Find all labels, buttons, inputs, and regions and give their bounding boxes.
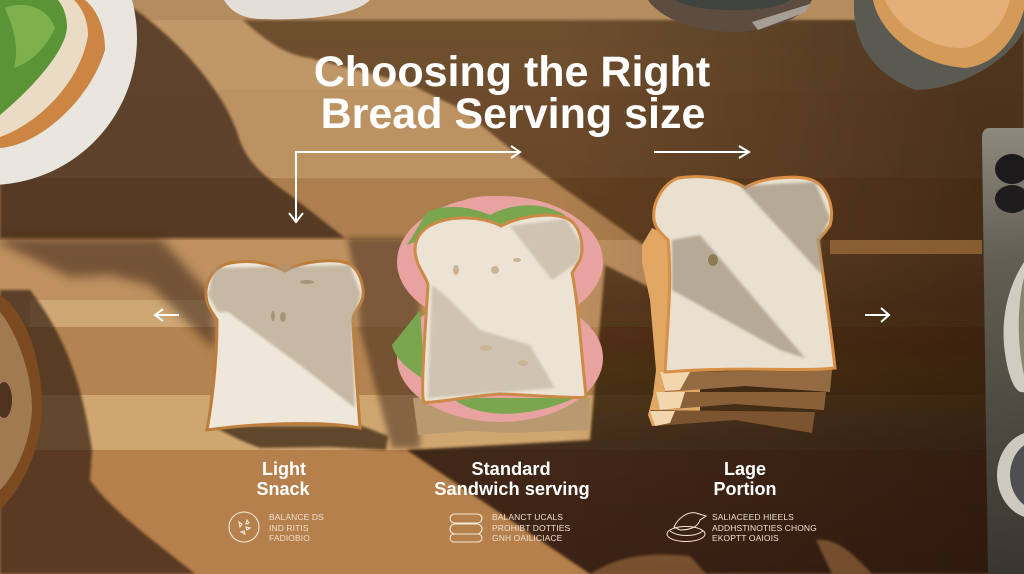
text: large portion notes: EKOPTT OAIOIS — [712, 533, 779, 543]
light snack bread slice — [206, 261, 363, 430]
label: large portion: Portion — [714, 479, 776, 499]
label: standard sandwich serving — [434, 458, 590, 499]
icon: dish with bird — [667, 513, 706, 542]
text: standard serving notes: BALANCT UCALS — [492, 512, 563, 522]
white bowl rim, top centre — [224, 0, 370, 19]
crumb holes — [271, 280, 314, 322]
text: standard serving notes: GNH OAILICIACE — [492, 533, 563, 543]
label: light snack — [256, 459, 310, 499]
arrow: left of light snack — [155, 309, 179, 321]
plate with sandwich, top left — [0, 0, 137, 185]
lit strip at right of the table — [830, 240, 982, 254]
text: light snack notes: BALANCE DS — [269, 512, 324, 522]
icon: circle — [229, 512, 259, 542]
sandwich: standard serving — [392, 196, 603, 435]
title — [314, 48, 710, 138]
arrow: right over large portion — [654, 146, 749, 158]
lower slices — [642, 228, 700, 426]
large portion: bread stack — [642, 177, 835, 433]
crumb holes — [453, 258, 528, 366]
text: light snack notes: IND RITIS — [269, 523, 309, 533]
label: standard sandwich serving: Sandwich serving — [434, 478, 590, 499]
label: light snack: Snack — [256, 479, 310, 499]
shadow across bread — [208, 265, 361, 408]
text: large portion notes: ADDHSTINOTIES CHONG — [712, 523, 817, 533]
bottom bread slice — [413, 398, 590, 435]
glass with bread roll, top right — [854, 0, 1024, 90]
text: standard serving notes: PROHIBT DOTTIES — [492, 523, 571, 533]
top bread slice — [415, 215, 586, 402]
arrow: elbow from top centre to light snack — [289, 146, 520, 222]
text: standard serving notes — [492, 512, 571, 543]
label: large portion — [714, 459, 776, 499]
icon: stacked layers — [450, 514, 482, 542]
text: light snack notes: FADIOBIO — [269, 533, 310, 543]
lettuce — [392, 205, 575, 414]
stove panel, right edge — [982, 128, 1024, 574]
ham slices — [397, 196, 603, 422]
shadow across bread — [672, 182, 830, 358]
text: light snack notes — [269, 512, 324, 543]
crumb hole — [708, 254, 718, 266]
bread loaf, bottom left — [0, 295, 42, 510]
shadow across bread — [428, 219, 582, 398]
title: Choosing the Right — [314, 48, 710, 96]
label: standard sandwich serving: Standard — [471, 458, 551, 479]
metal pot, top right — [648, 0, 812, 32]
text: large portion notes: SALIACEED HIEELS — [712, 512, 794, 522]
text: large portion notes — [712, 512, 817, 543]
top slice — [654, 177, 835, 372]
label: large portion: Lage — [724, 459, 766, 479]
arrow: right of large portion — [865, 308, 889, 322]
label: light snack: Light — [262, 459, 306, 479]
title: Bread Serving size — [321, 90, 705, 138]
